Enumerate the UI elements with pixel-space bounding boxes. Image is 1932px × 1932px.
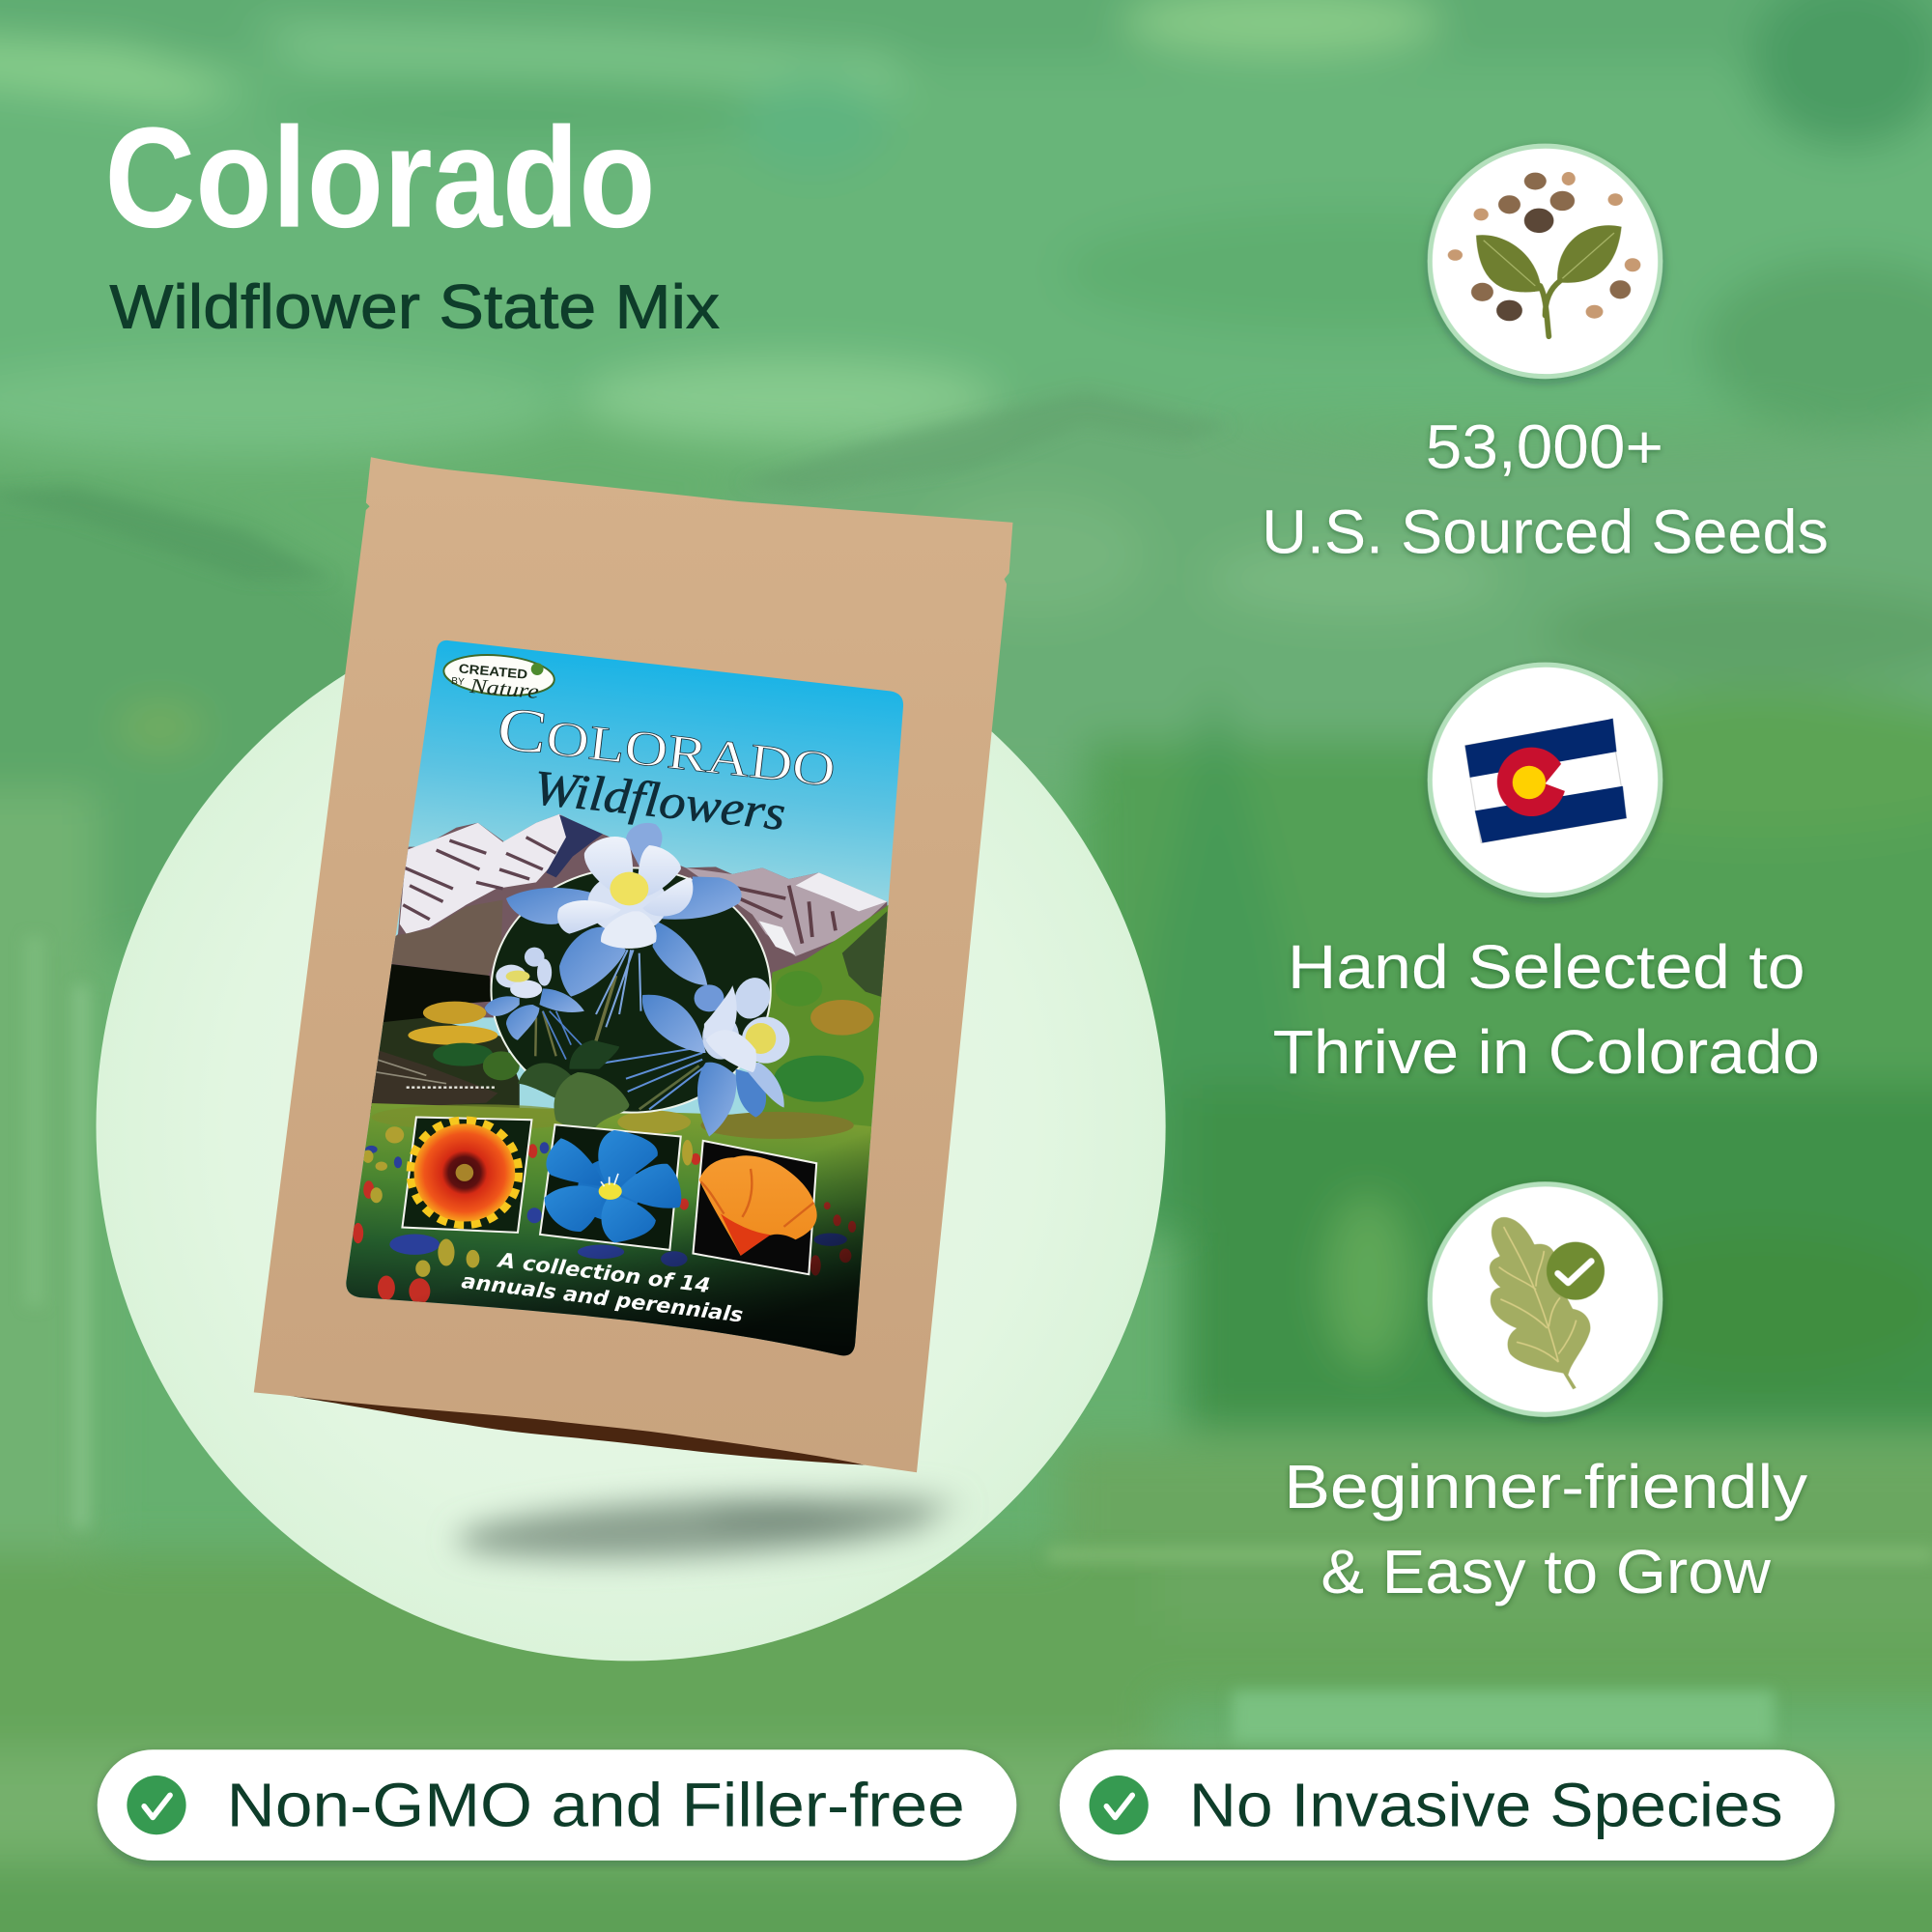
pouch body bbox=[254, 457, 1012, 1472]
hand selected text bbox=[1273, 932, 1820, 1087]
orange poppy bbox=[693, 1141, 817, 1274]
brand logo: CREATED bbox=[458, 661, 528, 682]
title: Colorado bbox=[104, 99, 656, 258]
brand logo: Nature bbox=[468, 674, 540, 703]
seed count text bbox=[1262, 412, 1829, 567]
main columbine bbox=[506, 823, 742, 997]
feature: beginner friendly bbox=[1284, 1184, 1807, 1606]
flower stems and spurs bbox=[535, 950, 706, 1109]
seed count text: 53,000+ bbox=[1426, 412, 1663, 482]
columbine medallion bbox=[485, 823, 789, 1137]
label tagline: A collection of 14 bbox=[496, 1247, 712, 1297]
beginner friendly text: Beginner-friendly bbox=[1284, 1452, 1807, 1521]
badge: no invasive species: No Invasive Species bbox=[1189, 1770, 1783, 1839]
pouch bottom gusset bbox=[291, 1396, 865, 1465]
brand logo bbox=[442, 651, 556, 703]
blanket flower bbox=[402, 1118, 531, 1233]
seed pouch bbox=[254, 457, 1012, 1472]
small columbine bbox=[485, 948, 584, 1040]
pouch shadow bbox=[455, 1487, 961, 1569]
label tagline bbox=[460, 1247, 745, 1327]
hand selected text: Hand Selected to bbox=[1288, 932, 1805, 1002]
icon: Colorado flag bbox=[1430, 665, 1661, 895]
feature: seeds bbox=[1262, 146, 1829, 567]
label title: COLORADO bbox=[494, 694, 839, 800]
badge: non-GMO: Non-GMO and Filler-free bbox=[227, 1770, 965, 1839]
label subtitle: Wildflowers bbox=[531, 761, 788, 841]
badge: non-GMO bbox=[98, 1749, 1016, 1861]
icon: check bbox=[127, 1776, 186, 1834]
icon: sprout and seeds bbox=[1430, 146, 1661, 377]
hand selected text: Thrive in Colorado bbox=[1273, 1017, 1820, 1087]
beginner friendly text bbox=[1284, 1452, 1807, 1606]
icon: leaf with check bbox=[1430, 1184, 1661, 1414]
right columbine bbox=[642, 973, 789, 1137]
leaves bbox=[518, 1040, 629, 1130]
label scenery: peaks and forests bbox=[366, 814, 892, 1143]
label scenery: meadow bbox=[332, 1103, 882, 1368]
label tagline: annuals and perennials bbox=[460, 1268, 745, 1327]
label artwork bbox=[346, 813, 889, 1356]
seed count text: U.S. Sourced Seeds bbox=[1262, 497, 1829, 567]
icon: check bbox=[1090, 1776, 1149, 1834]
brand logo: BY bbox=[451, 676, 465, 688]
feature: hand selected bbox=[1273, 665, 1820, 1087]
product label bbox=[321, 640, 903, 1380]
backdrop circle behind the pouch bbox=[96, 591, 1166, 1661]
beginner friendly text: & Easy to Grow bbox=[1321, 1537, 1772, 1606]
blue flax bbox=[540, 1124, 681, 1250]
badge: no invasive species bbox=[1060, 1749, 1834, 1861]
framed flowers bbox=[402, 1118, 817, 1274]
subtitle: Wildflower State Mix bbox=[110, 271, 720, 341]
